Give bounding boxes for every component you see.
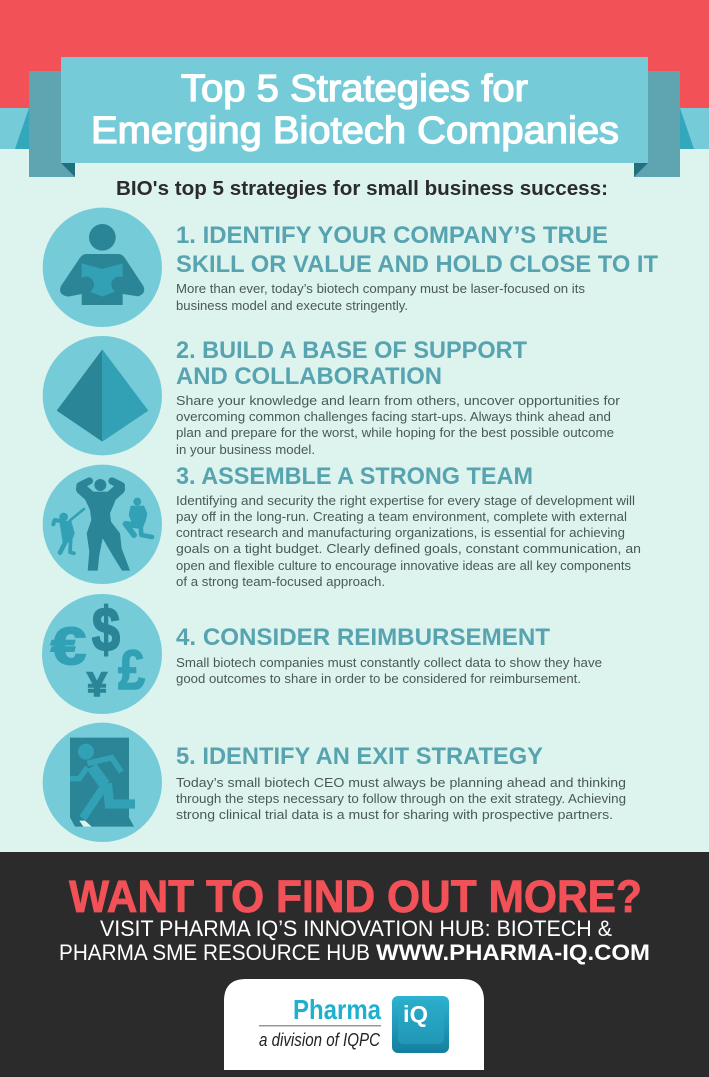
- heading 2: AND COLLABORATION: [176, 363, 442, 390]
- icon: pyramid: [43, 336, 162, 455]
- call to action heading: WANT TO FIND OUT MORE?: [69, 871, 642, 922]
- icon: bodybuilders: [43, 465, 162, 584]
- body 3: Identifying and security the right expertise for every stage of development will: [176, 493, 635, 508]
- call to action text: VISIT PHARMA IQ’S INNOVATION HUB: BIOTECH &: [100, 916, 612, 941]
- strategy 2: [43, 336, 621, 457]
- heading 1: 1. IDENTIFY YOUR COMPANY’S TRUE: [176, 222, 608, 249]
- heading 4: 4. CONSIDER REIMBURSEMENT: [176, 624, 550, 651]
- body 2: overcoming common challenges facing start-ups. Always think ahead and: [176, 409, 611, 424]
- body 4: Small biotech companies must constantly collect data to show they have: [176, 655, 602, 670]
- body 5: through the steps necessary to follow through on the exit strategy. Achieving: [176, 791, 626, 806]
- heading 3: 3. ASSEMBLE A STRONG TEAM: [176, 463, 533, 490]
- body 3: goals on a tight budget. Clearly defined goals, constant communication, an: [176, 541, 641, 556]
- body 3: contract research and manufacturing organizations, is essential for achieving: [176, 525, 625, 540]
- title: Top 5 Strategies for: [181, 68, 528, 110]
- body 1: [176, 281, 585, 313]
- icon: person reading: [43, 208, 162, 327]
- logo icon: iQ: [403, 1001, 428, 1027]
- body 3: pay off in the long-run. Creating a team environment, complete with external: [176, 509, 627, 524]
- icon: currency symbols: [42, 594, 162, 714]
- body 5: [176, 775, 626, 822]
- body 3: [176, 493, 641, 589]
- icon: currency symbols: €: [51, 618, 86, 676]
- body 2: plan and prepare for the worst, while hoping for the best possible outcome: [176, 425, 614, 440]
- icon: currency symbols: £: [118, 638, 145, 701]
- logo panel: [224, 979, 484, 1070]
- body 4: good outcomes to share in order to be considered for reimbursement.: [176, 671, 581, 686]
- icon: exit door with running figure: [43, 723, 162, 842]
- footer panel: [0, 852, 709, 1077]
- body 2: in your business model.: [176, 442, 315, 457]
- call to action text: WWW.PHARMA-IQ.COM: [376, 940, 650, 965]
- header background bands: [0, 0, 709, 149]
- heading 2: 2. BUILD A BASE OF SUPPORT: [176, 337, 527, 364]
- call to action text: [59, 916, 650, 965]
- body 1: More than ever, today’s biotech company must be laser-focused on its: [176, 281, 585, 296]
- heading 2: [176, 337, 527, 390]
- heading 1: SKILL OR VALUE AND HOLD CLOSE TO IT: [176, 251, 658, 278]
- heading 5: 5. IDENTIFY AN EXIT STRATEGY: [176, 743, 543, 770]
- body 5: strong clinical trial data is a must for sharing with prospective partners.: [176, 807, 613, 822]
- heading 1: [176, 222, 658, 278]
- title: Emerging Biotech Companies: [91, 110, 619, 152]
- strategy 5: [43, 723, 626, 842]
- title: [91, 68, 619, 152]
- icon: currency symbols: $: [92, 596, 120, 665]
- strategy 1: [43, 208, 658, 327]
- logo icon: [392, 996, 449, 1053]
- body 4: [176, 655, 602, 686]
- strategy 3: [43, 463, 641, 589]
- logo wordmark: Pharma: [293, 994, 381, 1025]
- call to action text: PHARMA SME RESOURCE HUB: [59, 940, 370, 965]
- body 2: [176, 393, 621, 457]
- title ribbon: [29, 57, 680, 177]
- logo tagline: a division of IQPC: [259, 1030, 381, 1050]
- icon: currency symbols: ¥: [87, 666, 107, 704]
- body 5: Today’s small biotech CEO must always be planning ahead and thinking: [176, 775, 626, 790]
- body 3: of a strong team-focused approach.: [176, 574, 385, 589]
- subtitle: BIO's top 5 strategies for small business success:: [116, 178, 608, 200]
- strategy 4: [42, 594, 602, 714]
- body 1: business model and execute stringently.: [176, 298, 408, 313]
- body 3: open and flexible culture to encourage innovative ideas are all key components: [176, 558, 631, 573]
- body 2: Share your knowledge and learn from others, uncover opportunities for: [176, 393, 621, 408]
